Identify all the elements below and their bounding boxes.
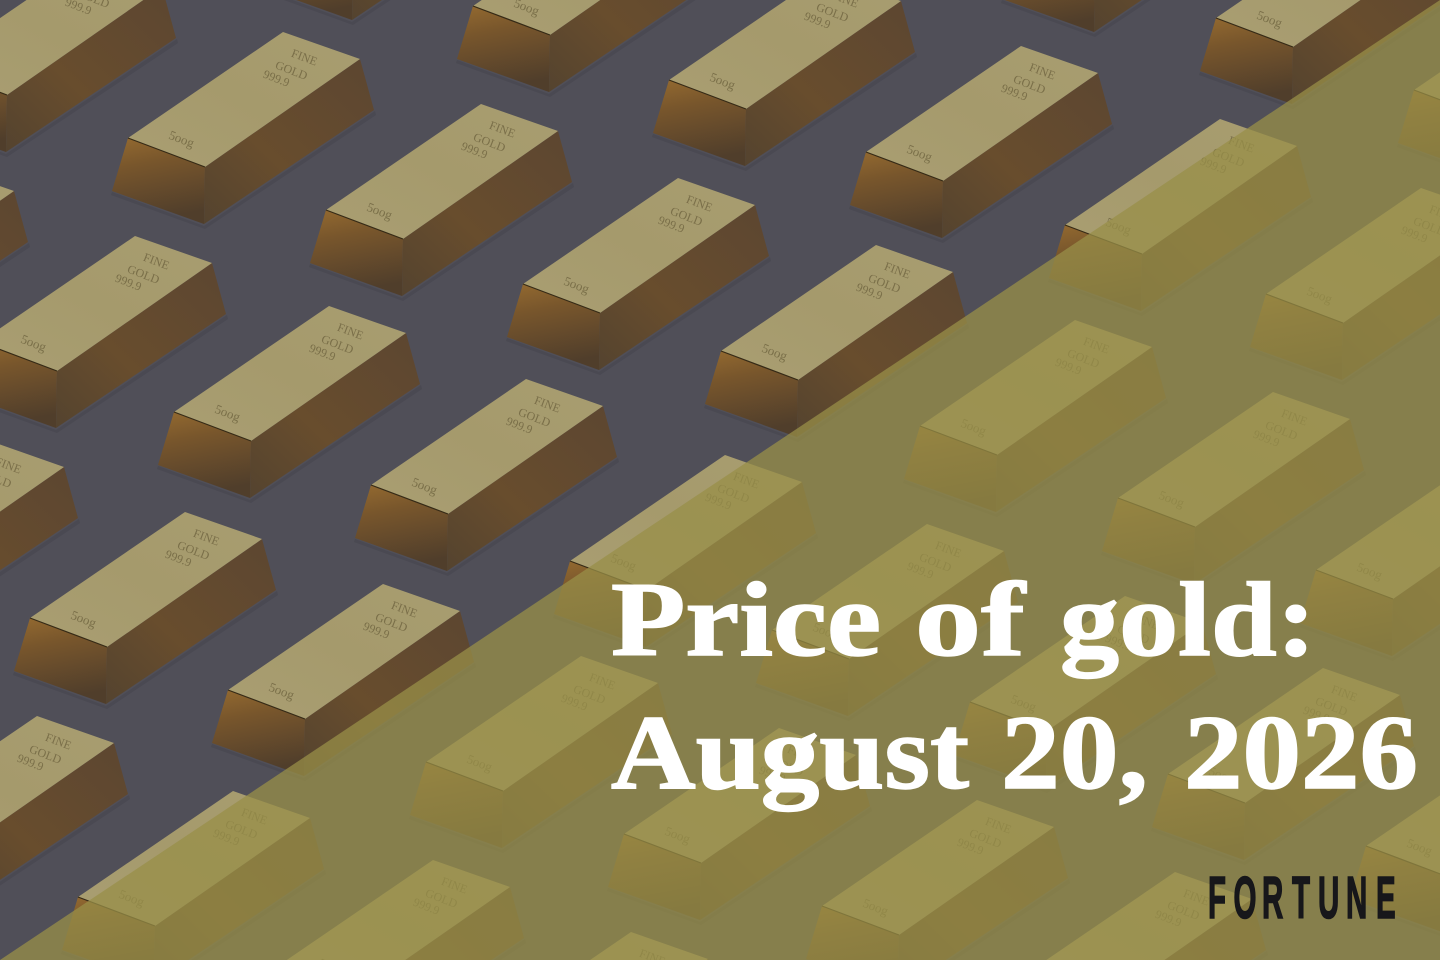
title: of — [915, 561, 1027, 678]
title: gold: — [1060, 561, 1316, 678]
title: 2026 — [1184, 694, 1418, 811]
Fortune logo: FORTUNE — [1208, 865, 1396, 931]
title: August — [611, 694, 969, 811]
title: 20, — [1001, 694, 1148, 811]
title — [611, 561, 1418, 811]
title: Price — [611, 561, 881, 678]
